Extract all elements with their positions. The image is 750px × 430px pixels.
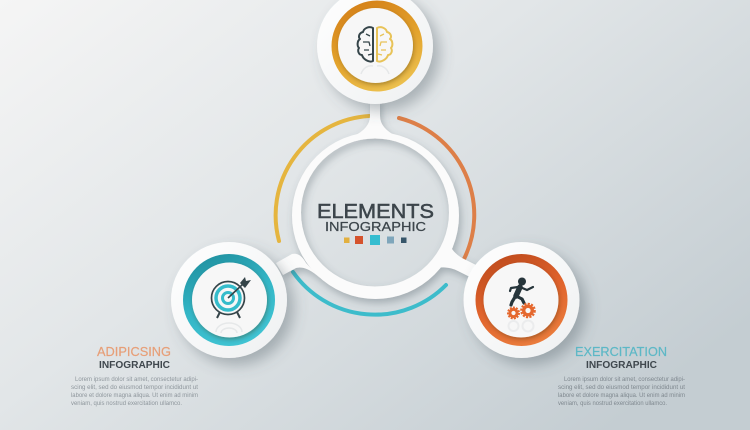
body: Lorem ipsum dolor sit amet, consectetur adipi- <box>75 376 198 383</box>
text block: adipicsing <box>71 344 198 407</box>
icon: target <box>212 277 251 333</box>
node: top brain <box>317 0 433 104</box>
body: scing elit, sed do eiusmod tempor incididunt ut <box>71 384 198 391</box>
node: right runner <box>464 242 580 358</box>
heading: ADIPICSING <box>97 344 171 359</box>
text block: exercitation <box>558 344 685 407</box>
heading: EXERCITATION <box>575 344 667 359</box>
body: scing elit, sed do eiusmod tempor incididunt ut <box>558 384 685 391</box>
subheading: INFOGRAPHIC <box>99 360 170 371</box>
body: Lorem ipsum dolor sit amet, consectetur adipi- <box>564 376 685 383</box>
icon: brain <box>358 27 392 74</box>
colour squares <box>344 235 406 245</box>
body: veniam, quis nostrud exercitation ullamco. <box>558 400 667 407</box>
subheading: infographic: INFOGRAPHIC <box>325 219 426 234</box>
icon: runner <box>510 278 533 305</box>
body: labore et dolore magna aliqua. Ut enim ad minim <box>558 392 685 399</box>
body <box>558 376 685 407</box>
arc: blue <box>293 272 446 315</box>
heading: elements: ELEMENTS <box>317 201 434 223</box>
central title <box>317 201 434 234</box>
central ring with connectors <box>276 98 482 299</box>
body <box>71 376 198 407</box>
arc: orange <box>399 118 474 259</box>
icon: gears <box>508 304 535 332</box>
body: veniam, quis nostrud exercitation ullamco. <box>71 400 182 407</box>
node: left target <box>171 242 287 358</box>
body: labore et dolore magna aliqua. Ut enim ad minim <box>71 392 198 399</box>
arc: yellow <box>276 116 369 241</box>
subheading: INFOGRAPHIC <box>586 360 657 371</box>
